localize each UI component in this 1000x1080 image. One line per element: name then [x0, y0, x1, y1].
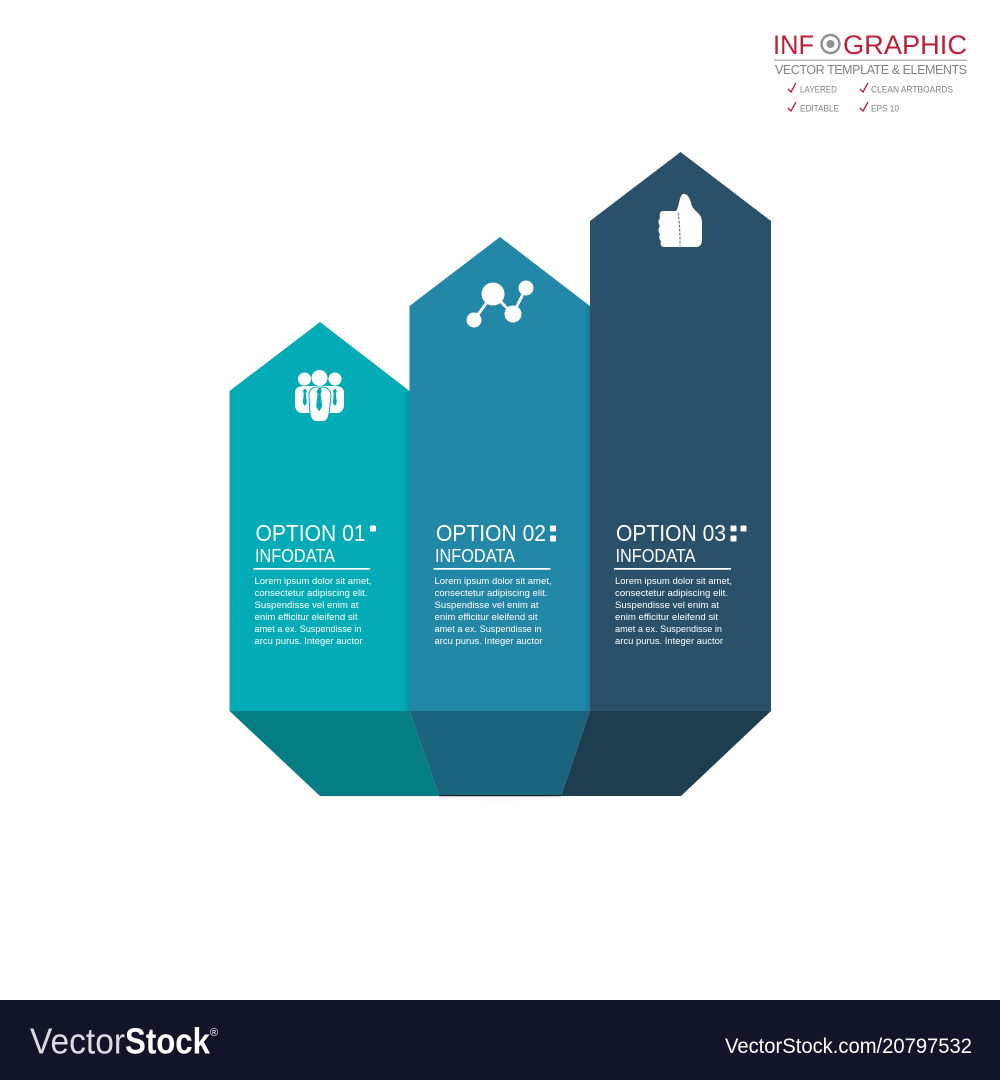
heading: option 02	[434, 520, 556, 570]
heading: option 03: OPTION 03	[616, 520, 726, 546]
feature checklist	[788, 83, 953, 114]
text block: option 02 body: Suspendisse vel enim at	[434, 600, 539, 611]
text block: option 03 body: amet a ex. Suspendisse in	[615, 624, 722, 635]
heading: option 01: INFODATA	[255, 546, 335, 566]
text block: option 03 body	[615, 576, 732, 647]
ground shadow	[435, 796, 565, 800]
footer logo: ®	[210, 1027, 218, 1039]
logo subtitle: VECTOR TEMPLATE & ELEMENTS	[775, 63, 967, 77]
text block: option 03 body: enim efficitur eleifend sit	[615, 612, 718, 623]
icon: thumbs up	[658, 194, 702, 247]
feature checklist: EPS 10	[871, 104, 899, 114]
heading: option 01	[254, 520, 376, 570]
panel: option 03 arrow	[561, 152, 771, 796]
text block: option 01 body: arcu purus. Integer auctor	[254, 636, 362, 647]
text block: option 01 body: Lorem ipsum dolor sit amet,	[254, 576, 372, 587]
text block: option 02 body	[434, 576, 552, 647]
text block: option 01 body: Suspendisse vel enim at	[254, 600, 359, 611]
heading: option 01: OPTION 01	[256, 520, 366, 546]
icon: network nodes	[466, 280, 534, 328]
text block: option 02 body: enim efficitur eleifend sit	[434, 612, 538, 623]
text block: option 01 body: consectetur adipiscing elit.	[254, 588, 368, 599]
text block: option 02 body: amet a ex. Suspendisse in	[434, 624, 542, 635]
text block: option 01 body: enim efficitur eleifend sit	[254, 612, 358, 623]
text block: option 03 body: consectetur adipiscing elit.	[615, 588, 728, 599]
text block: option 01 body: amet a ex. Suspendisse in	[254, 624, 362, 635]
footer logo	[30, 1020, 218, 1062]
panel: option 02 arrow	[410, 237, 590, 796]
logo title: INF	[773, 30, 814, 60]
panel: option 01 arrow	[230, 322, 439, 796]
heading: option 03: INFODATA	[616, 546, 696, 566]
text block: option 03 body: Lorem ipsum dolor sit amet,	[615, 576, 732, 587]
heading: option 02: INFODATA	[435, 546, 515, 566]
feature checklist: EDITABLE	[800, 104, 839, 114]
footer bar	[0, 1000, 1000, 1080]
heading: option 03	[614, 520, 746, 570]
footer image id: VectorStock.com/20797532	[725, 1035, 972, 1058]
text block: option 03 body: arcu purus. Integer auctor	[615, 636, 723, 647]
logo title: GRAPHIC	[843, 30, 967, 60]
feature checklist: LAYERED	[800, 84, 837, 94]
feature checklist: CLEAN ARTBOARDS	[871, 84, 953, 94]
logo target icon	[822, 35, 840, 53]
heading: option 02: OPTION 02	[436, 520, 546, 546]
icon: business team	[295, 370, 344, 422]
text block: option 01 body	[254, 576, 372, 647]
footer logo: Stock	[125, 1020, 211, 1062]
logo block: infographic vector template	[773, 30, 967, 114]
logo title	[773, 30, 967, 60]
text block: option 03 body: Suspendisse vel enim at	[615, 600, 719, 611]
footer logo: Vector	[30, 1020, 125, 1062]
text block: option 02 body: Lorem ipsum dolor sit amet,	[434, 576, 552, 587]
text block: option 02 body: arcu purus. Integer auctor	[434, 636, 542, 647]
text block: option 02 body: consectetur adipiscing elit.	[434, 588, 548, 599]
